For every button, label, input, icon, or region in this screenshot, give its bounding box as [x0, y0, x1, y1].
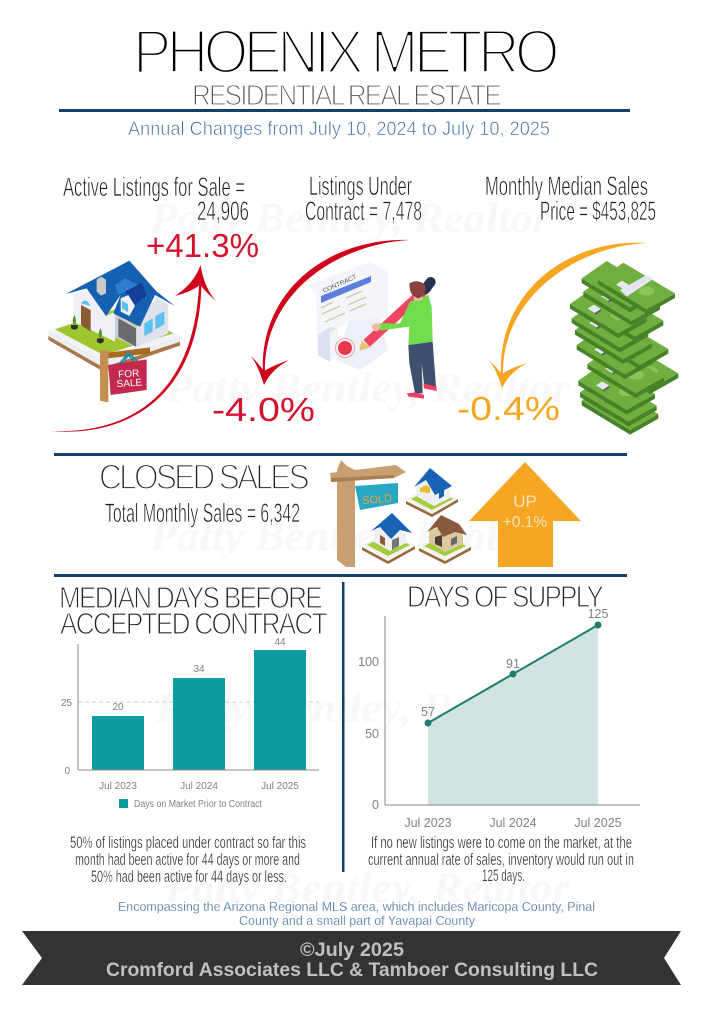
bar chart: days on market: 0	[64, 766, 70, 777]
sign label: FOR	[118, 368, 140, 381]
stat: listings under contract: Contract = 7,478	[305, 196, 422, 226]
heading: median days	[59, 580, 328, 641]
bar chart: days on market: 34	[193, 664, 205, 675]
bar chart: days on market: 44	[274, 637, 286, 648]
bar chart: days on market: Jul 2025	[261, 781, 299, 792]
heading: median days: MEDIAN DAYS BEFORE	[59, 580, 322, 615]
watermarks: Patty Bentley, Realtor	[149, 514, 551, 560]
text: median days note: 50% of listings placed under contract so far this	[70, 833, 306, 852]
subtitle: RESIDENTIAL REAL ESTATE	[192, 80, 501, 112]
area chart: days of supply: 0	[372, 798, 379, 812]
watermarks: Patty Bentley, Realtor	[164, 366, 571, 412]
date range: Annual Changes from July 10, 2024 to July 10, 2025	[128, 119, 550, 140]
icon: person signing with giant pencil	[359, 281, 437, 399]
text: total monthly sales: Total Monthly Sales = 6,342	[105, 498, 300, 528]
sold label: SOLD	[362, 493, 393, 507]
icon: house for sale	[48, 261, 180, 402]
percent: +41.3%: +41.3%	[146, 227, 259, 264]
sign label: SALE	[116, 377, 143, 390]
icon: up arrow: +0.1%	[503, 514, 547, 531]
panel divider	[342, 582, 344, 872]
watermarks: Patty Bentley, Realtor	[149, 196, 551, 242]
area chart: days of supply: Jul 2023	[404, 816, 452, 830]
heading: closed sales: CLOSED SALES	[99, 458, 308, 497]
area chart: days of supply: 50	[365, 727, 379, 741]
bar chart: days on market: Jul 2024	[180, 781, 218, 792]
area chart: days of supply	[358, 607, 640, 830]
text: coverage area note	[118, 900, 595, 928]
heading: days of supply: DAYS OF SUPPLY	[407, 579, 603, 614]
bar chart: days on market	[61, 637, 319, 810]
icon: up arrow	[469, 462, 581, 567]
stat: active listings	[63, 172, 249, 226]
arrow: red up	[50, 265, 216, 432]
percent: -0.4%: -0.4%	[457, 390, 560, 427]
bar chart: days on market: Jul 2023	[99, 781, 137, 792]
arrow: red down	[251, 240, 410, 385]
stat: listings under contract	[305, 171, 422, 226]
stat: active listings: 24,906	[197, 196, 249, 226]
stat: listings under contract: Listings Under	[309, 171, 412, 201]
stat: monthly median price	[485, 171, 656, 226]
icon: blue house	[406, 468, 458, 517]
banner copyright: ©July 2025	[300, 940, 404, 961]
icon: blue and white house	[362, 513, 415, 564]
arrow: orange down	[488, 243, 648, 388]
area chart: days of supply: Jul 2024	[489, 816, 537, 830]
area chart: days of supply: 125	[588, 607, 608, 621]
watermarks: Patty Bentley, Realtor	[154, 686, 561, 732]
sign label	[116, 368, 143, 390]
icon: contract document: CONTRACT	[322, 274, 358, 295]
chart legend: Days on Market Prior to Contract	[134, 799, 262, 810]
section rule	[54, 574, 627, 577]
percent: -4.0%: -4.0%	[212, 391, 315, 428]
area chart: days of supply: 91	[506, 657, 520, 671]
arrow label: UP	[513, 492, 537, 511]
bar chart: days on market: 25	[61, 698, 72, 709]
footer banner	[22, 931, 681, 985]
text: median days note: month had been active for 44 days or more and	[75, 850, 300, 869]
watermarks: Patty Bentley, Realtor	[164, 866, 571, 912]
text: coverage area note: Encompassing the Arizona Regional MLS area, which includes Maricopa County, Pinal	[118, 900, 595, 914]
text: days of supply note: 125 days.	[482, 866, 525, 885]
stat: active listings: Active Listings for Sale =	[63, 172, 245, 202]
area chart: days of supply: Jul 2025	[574, 816, 622, 830]
bar chart: days on market: 20	[112, 702, 124, 713]
area chart: days of supply: 100	[358, 655, 379, 669]
text: coverage area note: County and a small part of Yavapai County	[239, 914, 476, 928]
icon: brown house	[419, 515, 471, 564]
heading: median days: ACCEPTED CONTRACT	[60, 606, 328, 641]
banner credit: Cromford Associates LLC & Tamboer Consulting LLC	[106, 960, 598, 981]
watermarks	[149, 196, 571, 912]
area chart: days of supply: 57	[421, 705, 435, 719]
title: PHOENIX METRO	[133, 18, 558, 87]
section rule	[54, 453, 627, 456]
header rule	[59, 109, 630, 112]
text: days of supply note	[368, 833, 634, 885]
text: median days note	[70, 833, 306, 886]
text: median days note: 50% had been active for 44 days or less.	[91, 867, 287, 886]
icon: contract document	[308, 262, 388, 370]
icon: stacks of money	[570, 261, 678, 435]
icon: sold post	[330, 460, 406, 567]
